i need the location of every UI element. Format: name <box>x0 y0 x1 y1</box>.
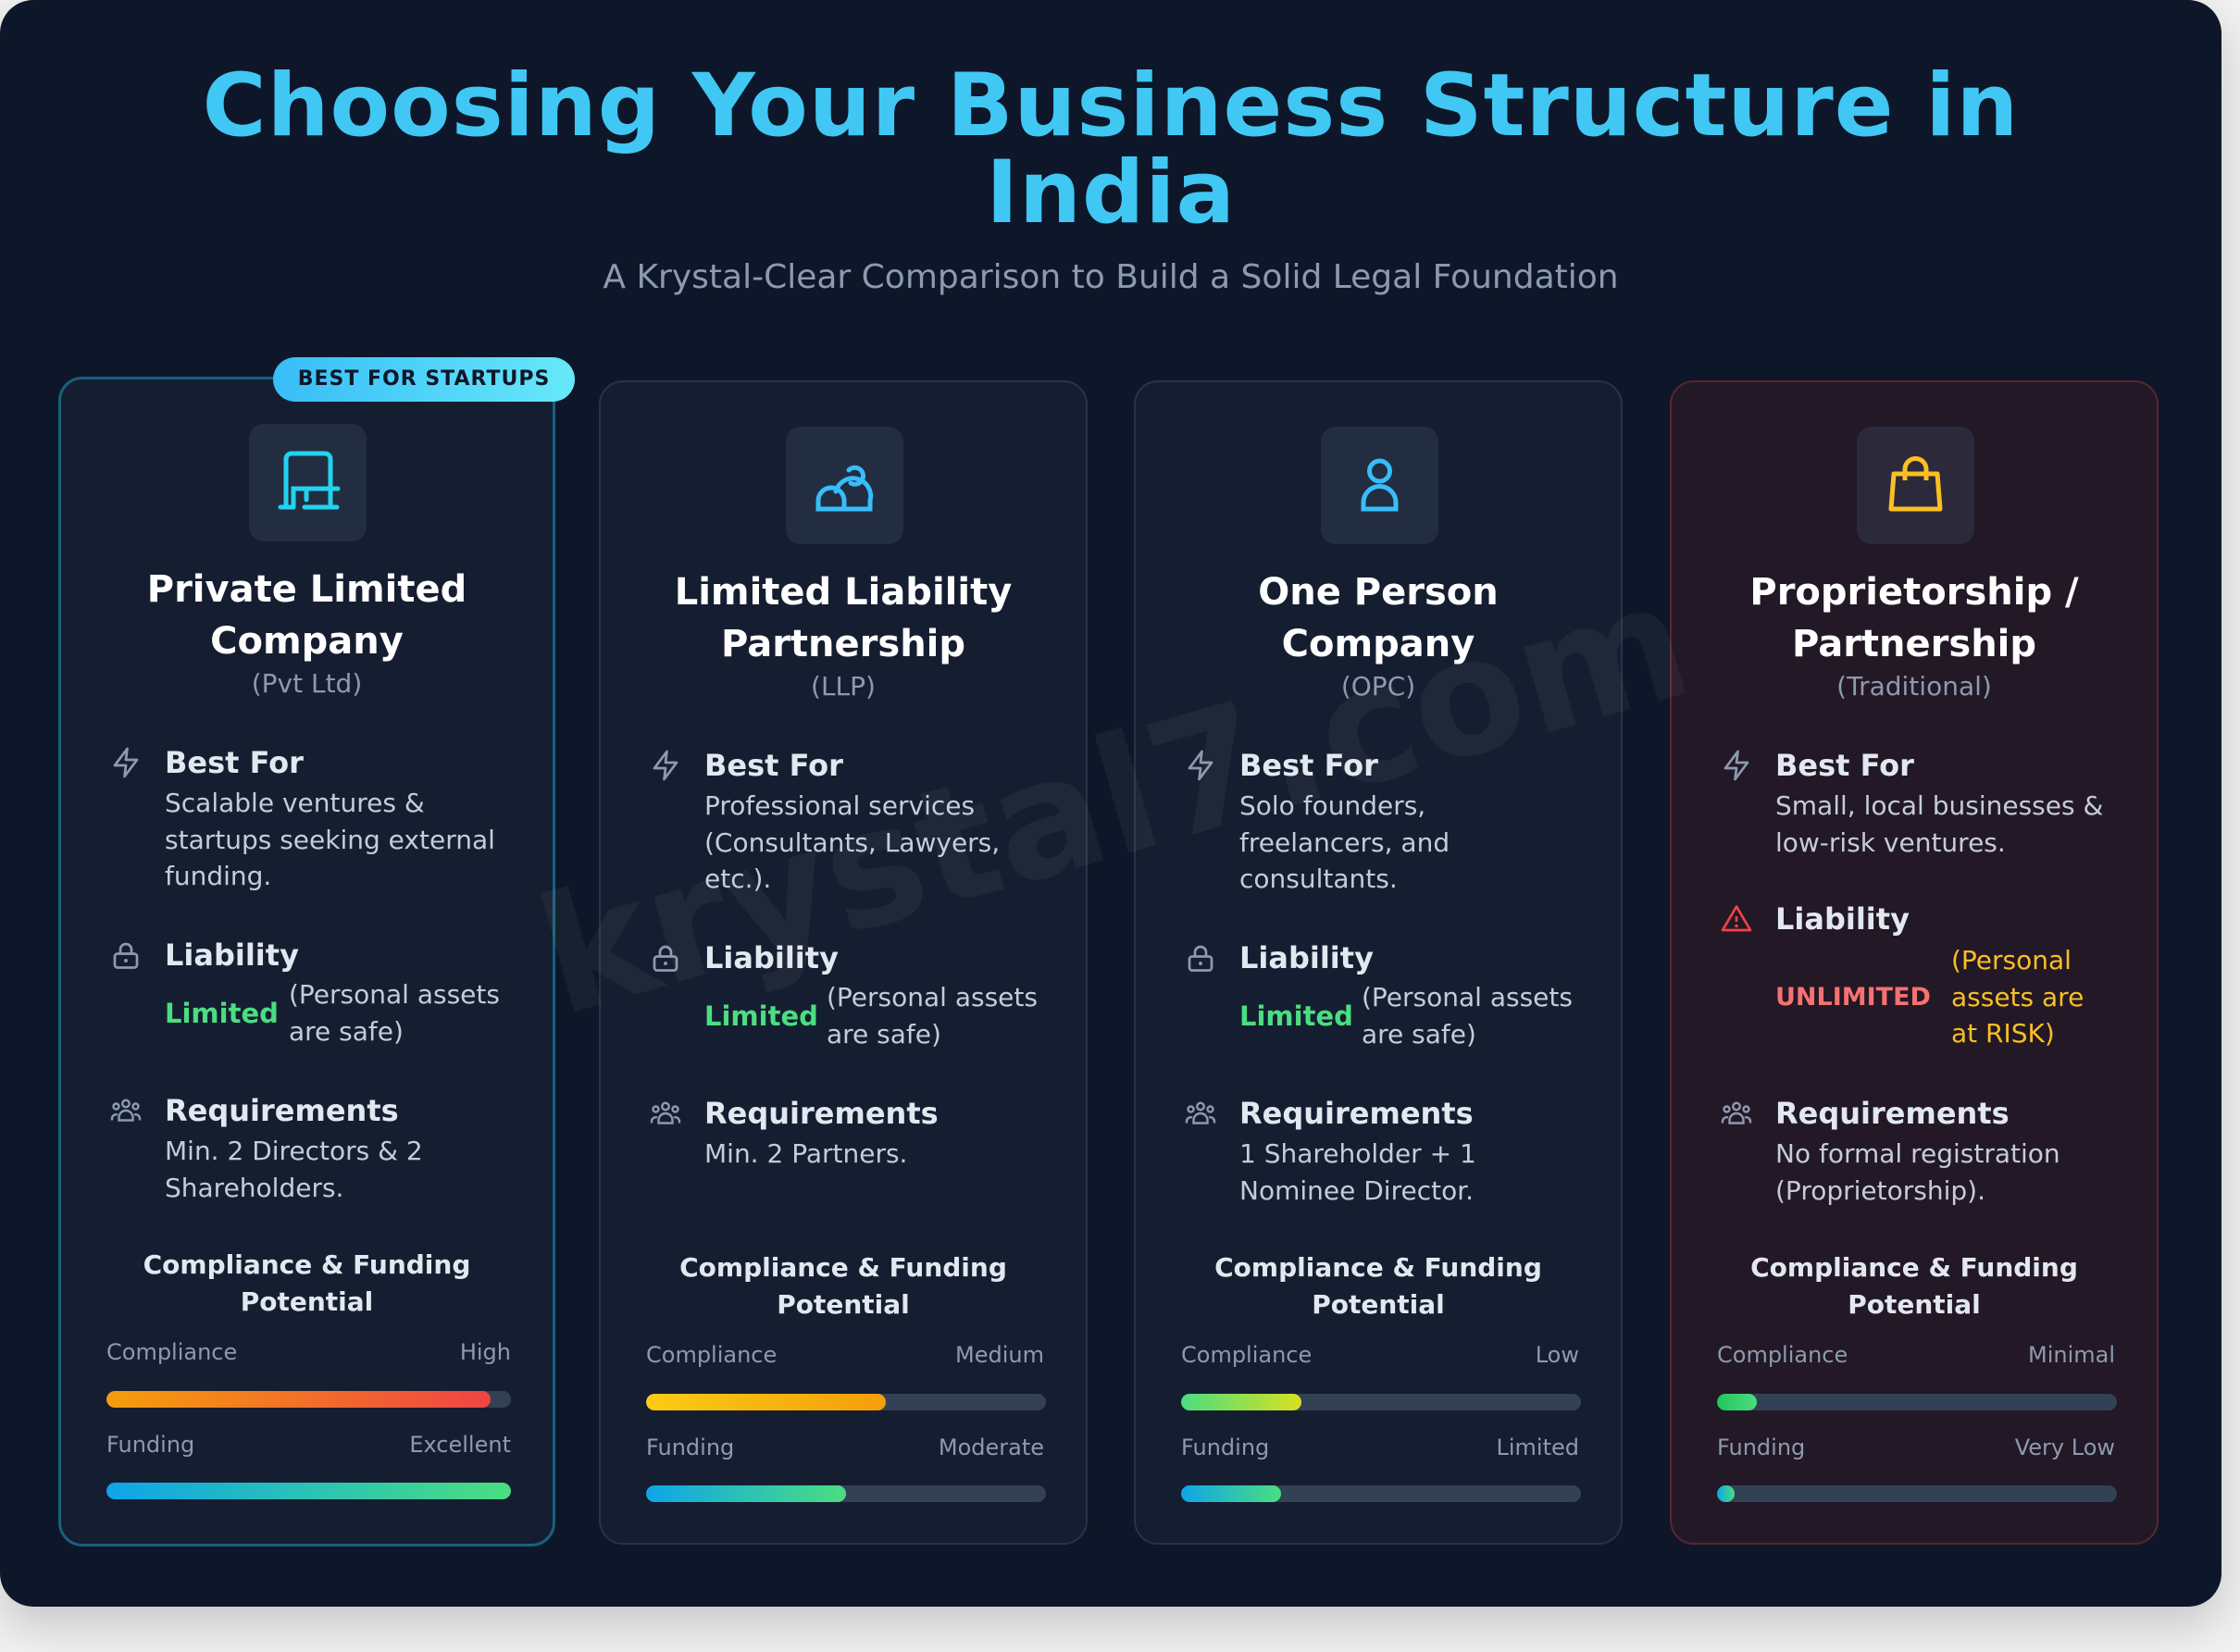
compliance & funding: Potential <box>1312 1289 1445 1320</box>
title: India <box>986 143 1236 243</box>
card content: Funding <box>1181 1435 1269 1460</box>
icon: lock <box>653 946 678 972</box>
card content: Compliance <box>646 1342 777 1368</box>
icon: building <box>249 424 367 541</box>
card subtitle: (Pvt Ltd) <box>252 668 362 699</box>
compliance & funding: Compliance & Funding <box>1214 1252 1542 1283</box>
icon: group <box>1185 1101 1216 1124</box>
requirements: Requirements <box>165 1093 399 1128</box>
panel: proprietorship <box>1670 380 2159 1545</box>
card content: Compliance <box>1717 1342 1848 1368</box>
card content: Limited <box>165 998 279 1029</box>
card content: (Proprietorship). <box>1775 1175 1985 1205</box>
card content: Very Low <box>2015 1435 2115 1460</box>
icon: bolt <box>113 748 139 777</box>
card content: Low <box>1536 1342 1579 1368</box>
card title <box>675 571 1012 665</box>
panel: LLP <box>599 380 1088 1545</box>
badge <box>273 357 575 402</box>
title: Choosing Your Business Structure in <box>203 56 2019 156</box>
best for: Best For <box>1775 748 1914 783</box>
icon: warning <box>1722 905 1751 931</box>
card content: Compliance <box>106 1339 237 1365</box>
card content: Scalable ventures & <box>165 788 425 818</box>
compliance & funding: Compliance & Funding <box>1750 1252 2078 1283</box>
card content: at RISK) <box>1951 1018 2055 1049</box>
card content: (Consultants, Lawyers, <box>704 827 1000 857</box>
card content: No formal registration <box>1775 1138 2060 1169</box>
card content: (Personal <box>1951 945 2072 975</box>
card content: startups seeking external <box>165 824 495 855</box>
icon: lock <box>1188 946 1213 972</box>
card content: Limited <box>1496 1435 1579 1460</box>
card content: funding. <box>165 861 271 891</box>
compliance & funding <box>1750 1252 2078 1320</box>
requirements: Requirements <box>704 1096 939 1131</box>
card content <box>106 424 511 1499</box>
icon: bolt <box>653 750 678 781</box>
icon: group <box>1722 1101 1751 1124</box>
badge: BEST FOR STARTUPS <box>298 367 550 391</box>
card content: Limited <box>1239 1000 1353 1032</box>
card content: Excellent <box>409 1432 511 1458</box>
compliance & funding <box>143 1249 470 1317</box>
card content: Funding <box>1717 1435 1805 1460</box>
card content: assets are <box>1951 981 2084 1012</box>
liability: Liability <box>1775 901 1910 937</box>
icon: group <box>650 1101 681 1124</box>
card content: (Personal assets <box>289 979 500 1010</box>
compliance & funding <box>679 1252 1007 1320</box>
card title: Private Limited <box>147 568 467 611</box>
card content: Limited <box>704 1000 818 1032</box>
card content <box>1717 427 2117 1502</box>
card content: Funding <box>646 1435 734 1460</box>
compliance & funding: Potential <box>241 1286 373 1317</box>
compliance & funding <box>1214 1252 1542 1320</box>
card content: Minimal <box>2028 1342 2115 1368</box>
card content: freelancers, and <box>1239 827 1450 857</box>
watermark: krystal7.com <box>520 546 1709 1053</box>
card content: Small, local businesses & <box>1775 790 2103 821</box>
card title: Limited Liability <box>675 571 1012 614</box>
panel: OPC <box>1134 380 1623 1545</box>
icon: bolt <box>1188 750 1213 781</box>
card title <box>1749 571 2079 665</box>
card content: Min. 2 Directors & 2 <box>165 1136 423 1166</box>
card content: consultants. <box>1239 863 1398 894</box>
card content: Funding <box>106 1432 194 1458</box>
card content: UNLIMITED <box>1775 983 1931 1012</box>
card title: Partnership <box>1792 623 2036 665</box>
card content: (Personal assets <box>1362 982 1573 1012</box>
card content: Medium <box>955 1342 1044 1368</box>
card content: Min. 2 Partners. <box>704 1138 907 1169</box>
card content: 1 Shareholder + 1 <box>1239 1138 1476 1169</box>
card content: (Personal assets <box>827 982 1038 1012</box>
icon: bolt <box>1724 750 1749 781</box>
card content: Solo founders, <box>1239 790 1425 821</box>
card content: Nominee Director. <box>1239 1175 1474 1205</box>
icon: bag <box>1857 427 1974 544</box>
liability: Liability <box>704 940 839 975</box>
requirements: Requirements <box>1239 1096 1474 1131</box>
card title: Company <box>1282 623 1475 665</box>
requirements: Requirements <box>1775 1096 2010 1131</box>
card content: are safe) <box>1362 1018 1476 1050</box>
card subtitle: (Traditional) <box>1836 671 1992 702</box>
card content: High <box>460 1339 511 1365</box>
card subtitle: (OPC) <box>1341 671 1415 702</box>
subtitle: A Krystal-Clear Comparison to Build a Solid Legal Foundation <box>603 258 1619 296</box>
icon: group <box>111 1099 141 1122</box>
icon: partners <box>786 427 903 544</box>
compliance & funding: Compliance & Funding <box>679 1252 1007 1283</box>
card content: Shareholders. <box>165 1172 343 1203</box>
card content: Compliance <box>1181 1342 1312 1368</box>
card subtitle: (LLP) <box>811 671 876 702</box>
card content: are safe) <box>827 1018 941 1050</box>
card title <box>147 568 467 663</box>
card content: etc.). <box>704 863 771 894</box>
best for: Best For <box>704 748 843 783</box>
card title: Partnership <box>721 623 965 665</box>
icon: person <box>1321 427 1438 544</box>
title <box>203 56 2019 243</box>
card title <box>1258 571 1499 665</box>
panel: private limited company <box>58 377 555 1546</box>
compliance & funding: Potential <box>1848 1289 1981 1320</box>
best for: Best For <box>1239 748 1378 783</box>
card content: low-risk ventures. <box>1775 827 2006 857</box>
liability: Liability <box>165 938 299 973</box>
compliance & funding: Potential <box>777 1289 910 1320</box>
card content: are safe) <box>289 1016 404 1046</box>
card content: Moderate <box>939 1435 1044 1460</box>
card title: Proprietorship / <box>1749 571 2079 614</box>
best for: Best For <box>165 745 304 780</box>
compliance & funding: Compliance & Funding <box>143 1249 470 1280</box>
liability: Liability <box>1239 940 1374 975</box>
card content <box>1181 427 1581 1502</box>
card content: Professional services <box>704 790 975 821</box>
icon: lock <box>113 942 139 969</box>
card title: Company <box>210 620 404 663</box>
card title: One Person <box>1258 571 1499 614</box>
card content <box>646 427 1046 1502</box>
